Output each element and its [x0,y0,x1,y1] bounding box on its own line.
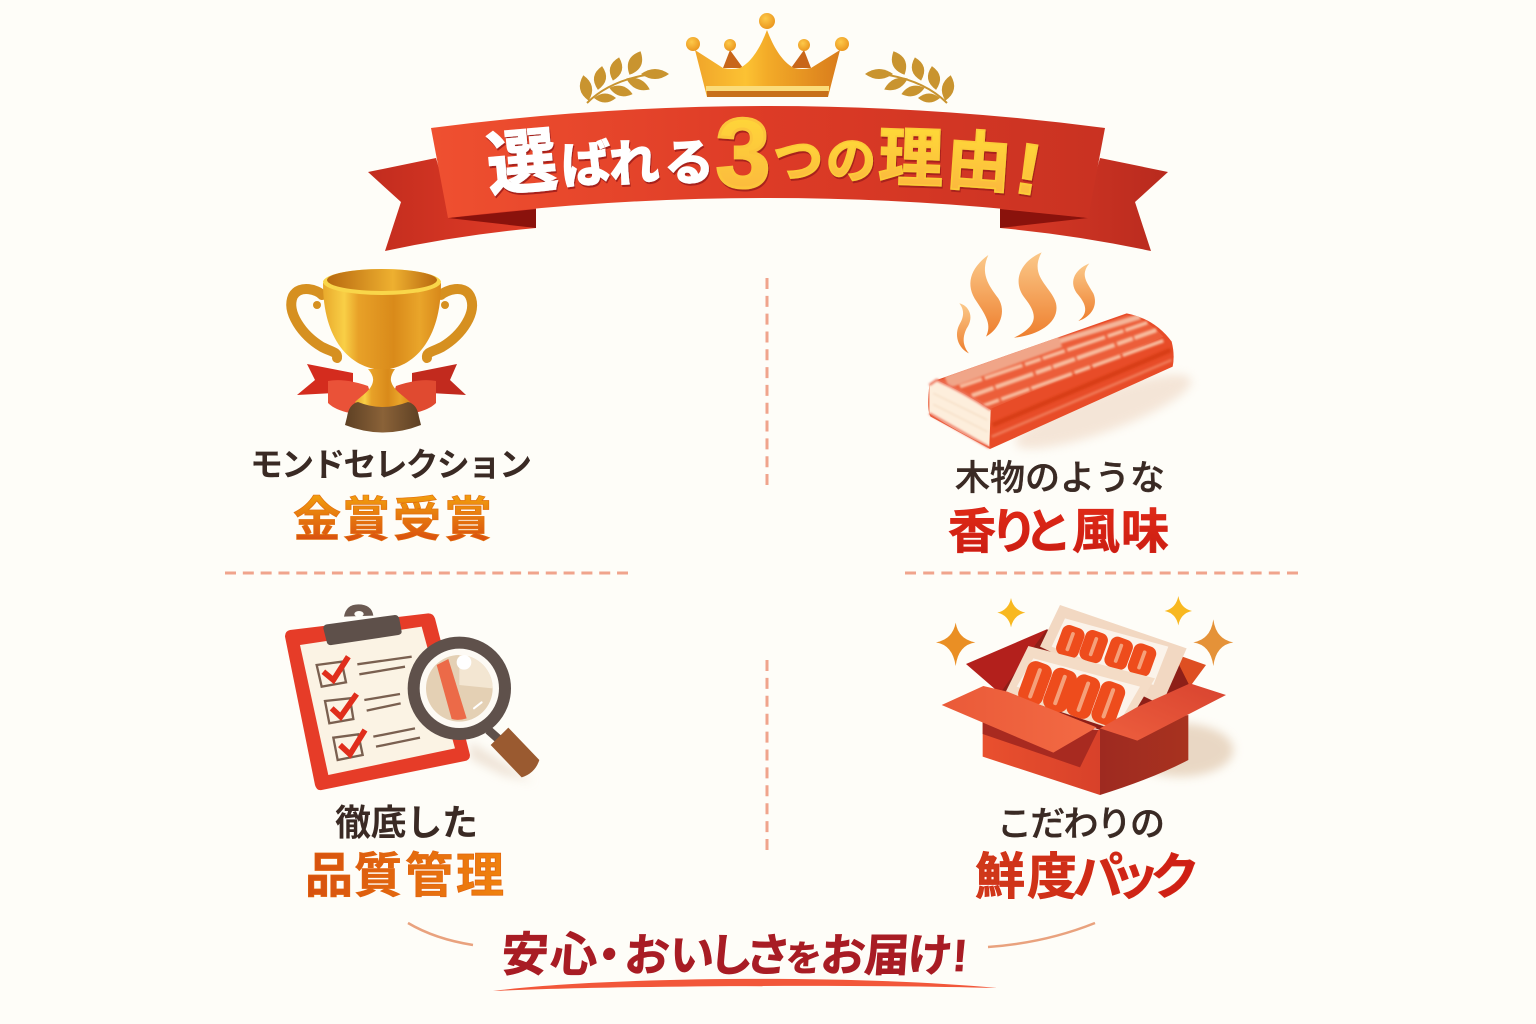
dashed dividers [225,278,1298,850]
heading: gold award: 金賞受賞 [293,494,492,547]
icon: sparkles [936,596,1233,666]
heading: quality control: 品質管理 [305,850,504,903]
subheading: carefully chosen: こだわりの [997,805,1165,844]
title: ! [1010,129,1046,211]
heading: aroma and flavor: 香りと風味 [948,506,1169,559]
title [484,98,1046,211]
title: つ [772,133,823,189]
subheading: real-like: 木物のような [955,459,1165,498]
icon: crab stick with aroma [928,252,1198,462]
subheading: Monde Selection: モンドセレクション [250,446,532,483]
subheading: thorough: 徹底した [335,802,478,843]
title: ば [559,135,613,195]
title: る [663,134,715,192]
right accent curve [988,923,1095,947]
icon: right laurel [865,48,957,103]
icon: open box with packs [936,596,1233,795]
title: れ [608,135,660,193]
title: 理 [877,121,945,196]
underline brush [493,979,997,991]
title: 選 [484,121,560,205]
left accent curve [408,923,473,945]
title: 由 [944,124,1014,201]
title: の [825,132,877,190]
panel: Monde Selection gold award [250,269,532,547]
icon: crown [686,13,849,97]
panel: freshness pack [936,596,1233,905]
title: 3 [716,98,770,208]
panel: thorough quality control [285,604,539,903]
icon: left laurel [577,48,669,103]
icon: clipboard and magnifier [285,604,539,790]
heading: freshness pack: 鮮度パック [975,849,1200,905]
footer message [408,923,1095,991]
panel: aroma and flavor [928,252,1198,559]
footer text: 安心・おいしさをお届け! [500,928,970,981]
icon: trophy [291,269,472,432]
banner ribbon [368,106,1168,251]
